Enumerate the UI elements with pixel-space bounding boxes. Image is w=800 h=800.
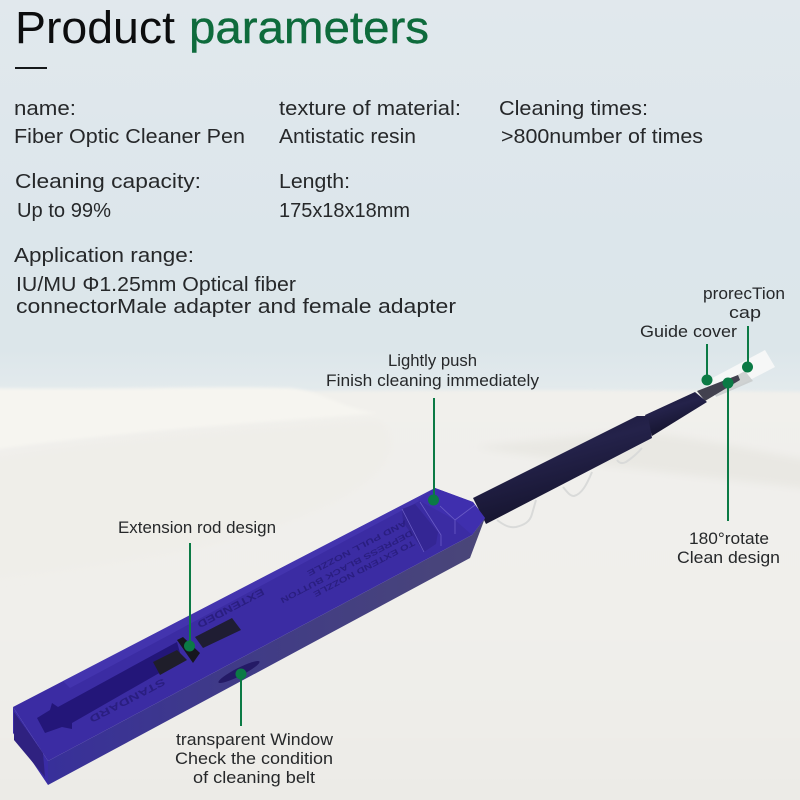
embossed text: AND PULL NOZZLE [305,518,408,578]
title: Product [15,2,176,53]
callout: protection cap [703,285,785,372]
parameter: texture of material: Antistatic resin [279,126,416,148]
callout: 180 degree rotate: Clean design [677,549,780,567]
callout: lightly push: Finish cleaning immediately [326,372,540,390]
callout: protection cap: cap [729,304,761,322]
thick shaft [473,416,652,524]
callout: transparent window: of cleaning belt [193,769,315,787]
title [15,2,429,53]
parameter: name: Fiber Optic Cleaner Pen [14,126,245,148]
callout: transparent window: transparent Window [176,731,333,749]
slider tab [177,637,200,663]
parameter: name: name: [14,98,76,120]
thin shaft [645,392,707,436]
parameter: length [279,171,410,222]
parameter: cleaning times [499,98,703,148]
callout: 180 degree rotate: 180°rotate [689,530,769,548]
upper rim highlight [63,488,440,688]
wire loops [497,448,642,527]
parameter: cleaning capacity [15,171,201,222]
title underline [15,67,47,69]
parameter: name [14,98,245,148]
callout: lightly push: Lightly push [388,352,477,370]
icon: fiber cleaner pen [13,350,775,785]
body top face [13,488,485,761]
parameter: application range: IU/MU Φ1.25mm Optical fiber [16,274,296,296]
callout: extension rod: Extension rod design [118,519,276,537]
tip [697,375,740,401]
parameter: texture of material: texture of material: [279,98,461,120]
head bevel and chevrons [418,488,485,535]
callout: guide cover [640,323,738,386]
callout: 180 degree rotate [677,378,780,567]
embossed text: TO EXTEND NOZZLE [311,538,416,599]
parameter: cleaning times: >800number of times [501,126,703,148]
callout: lightly push [326,352,540,506]
parameter: length: 175x18x18mm [279,200,410,222]
parameter: texture of material [279,98,461,148]
callout: transparent window: Check the condition [175,750,333,768]
embossed text: STANDARD [87,675,167,724]
parameter: application range: Application range: [14,245,194,267]
callout: extension rod [118,519,276,652]
embossed text: DEPRESS BLACK BUTTON [279,528,414,605]
callout: protection cap: prorecTion [703,285,785,303]
parameter: cleaning capacity: Cleaning capacity: [15,171,201,193]
protection cap [703,350,775,398]
callout: guide cover: Guide cover [640,323,738,341]
far window [195,618,241,648]
slot [37,642,182,733]
embossed text [87,518,416,724]
embossed text: EXTENDED [195,585,266,629]
black slider interior [153,650,187,675]
parameter: application range [14,245,456,318]
transparent window [217,658,261,686]
callout: transparent window [175,668,333,787]
title: parameters [189,2,429,53]
parameter: cleaning times: Cleaning times: [499,98,648,120]
parameter: cleaning capacity: Up to 99% [17,200,111,222]
front face with hollow [13,707,48,785]
parameter: application range: connectorMale adapter and female adapter [16,296,456,318]
parameter: length: Length: [279,171,350,193]
body side [48,518,485,785]
